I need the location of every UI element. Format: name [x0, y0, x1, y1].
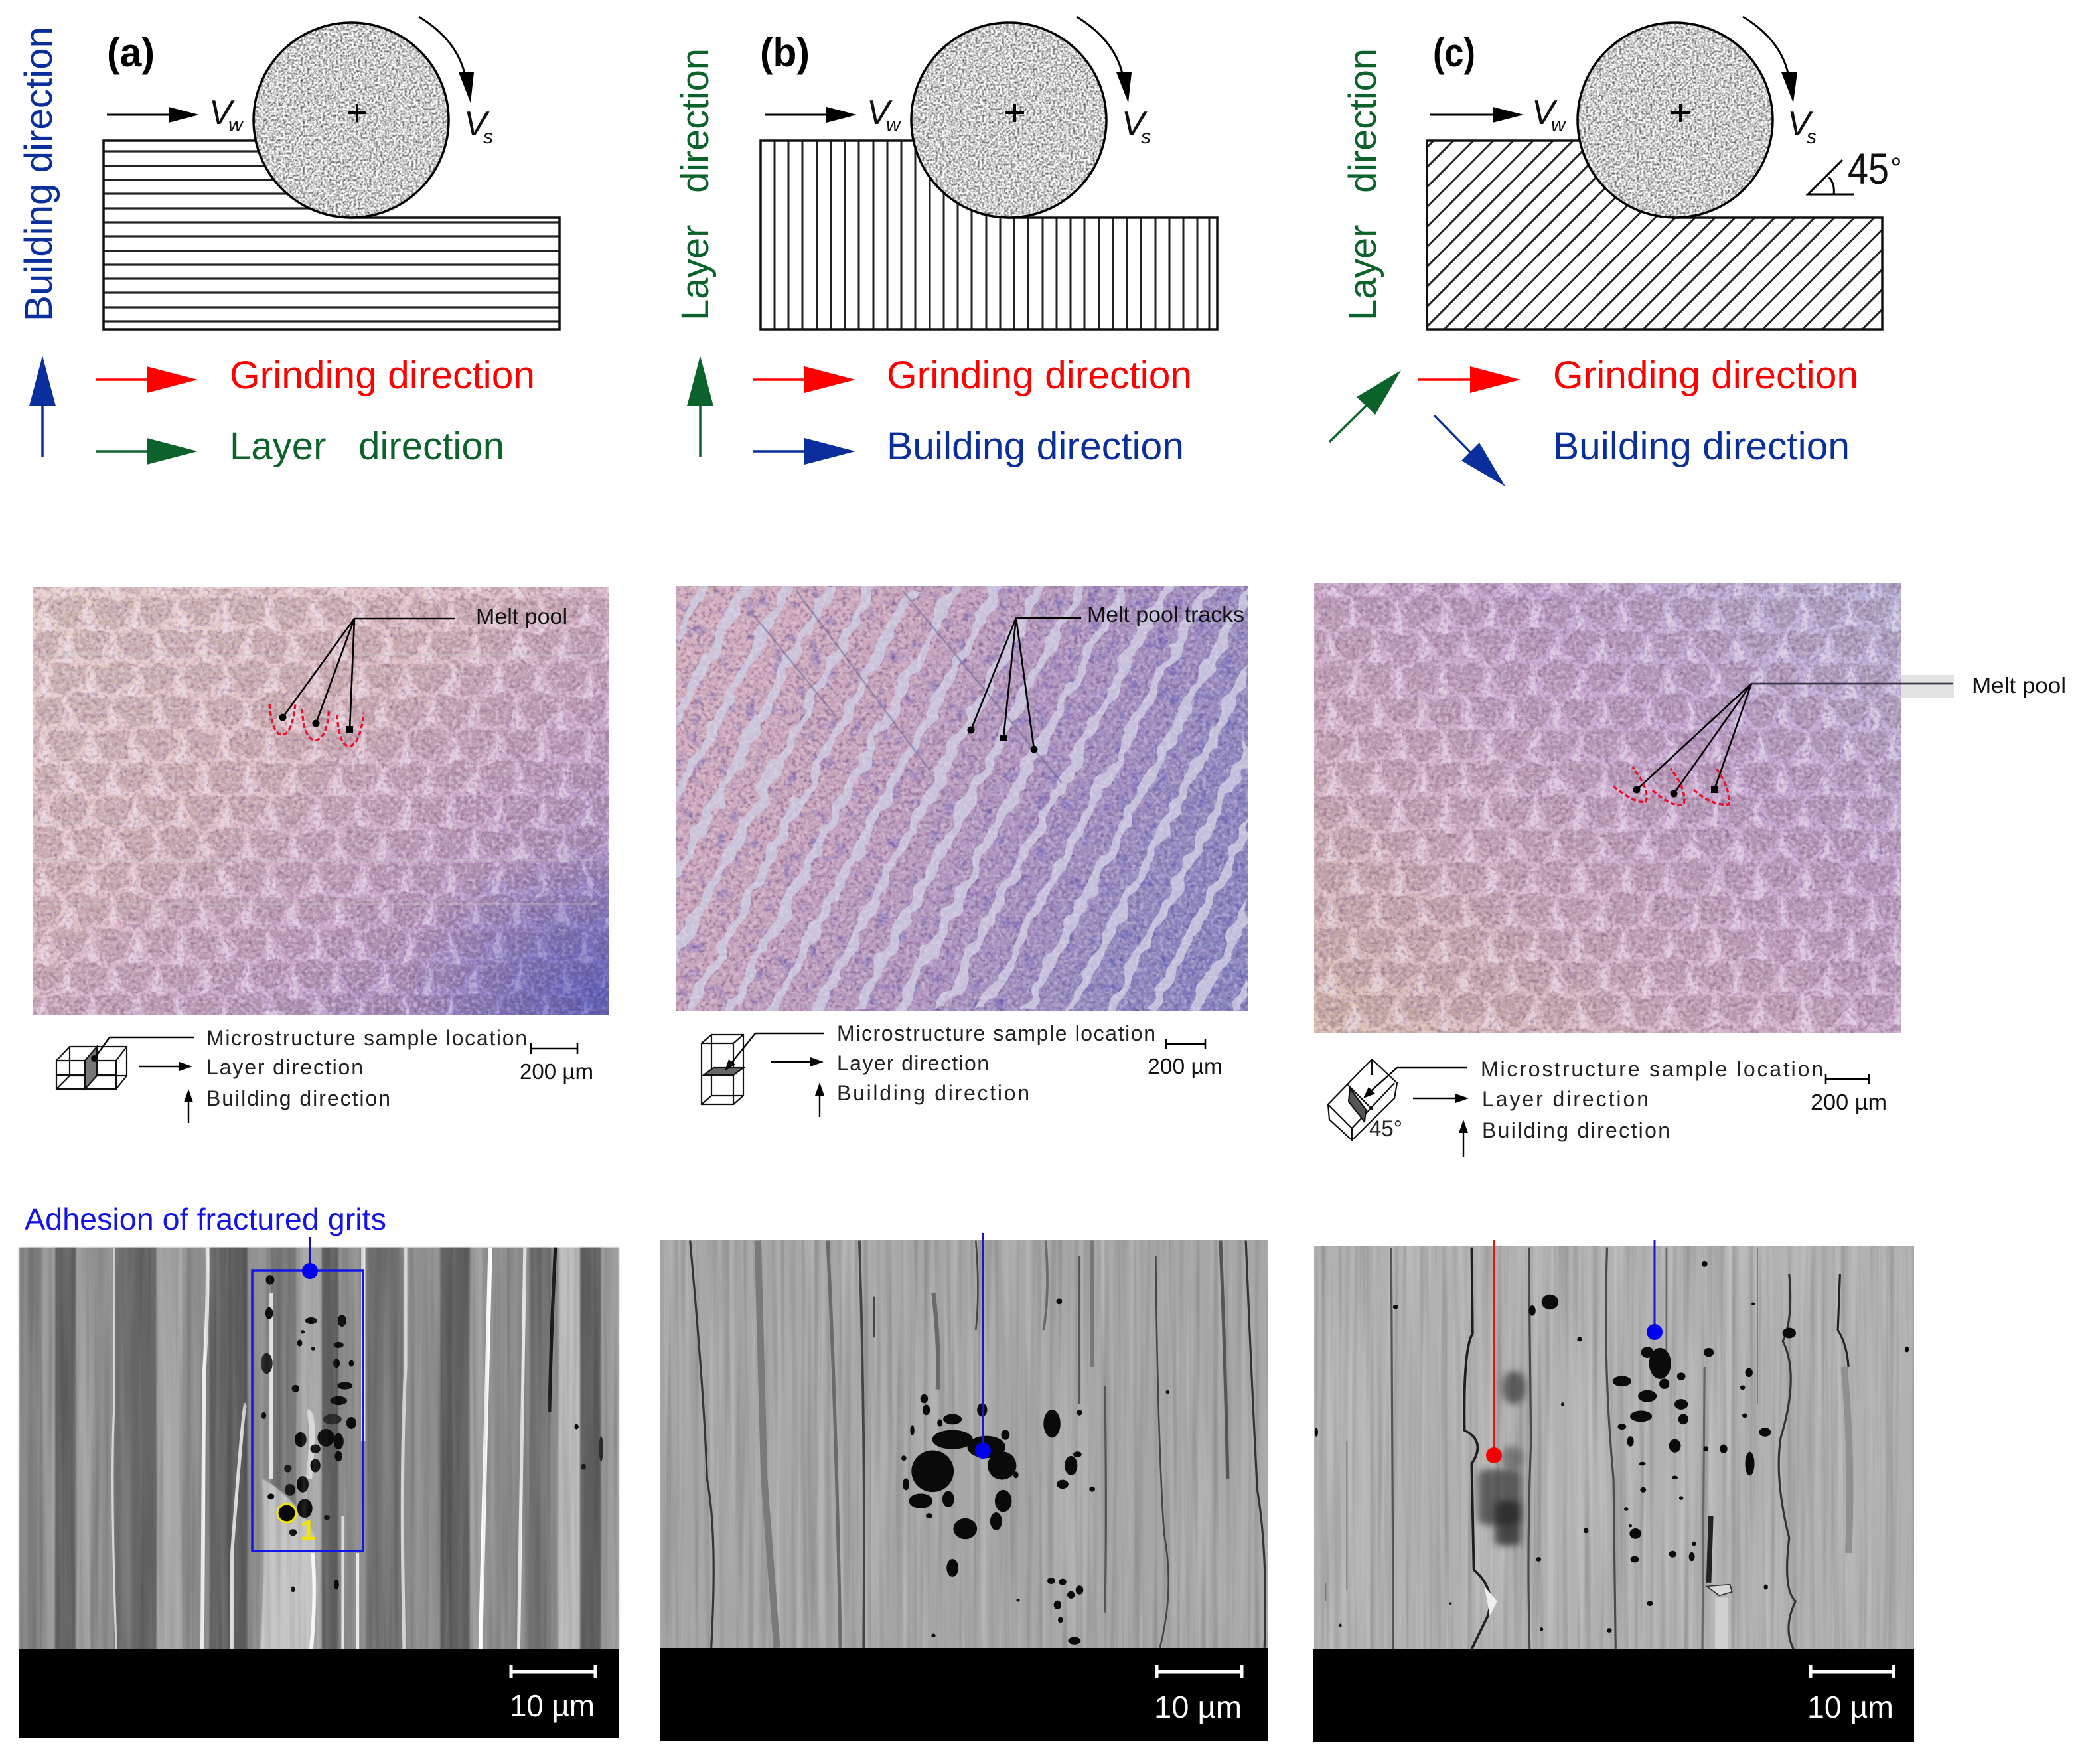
panel: SEM image (b)	[660, 1233, 1268, 1741]
sample orientation legend	[56, 1026, 593, 1123]
layer direction legend: Layer direction	[230, 425, 504, 468]
icon: sample cube	[56, 1047, 127, 1089]
microstructure sample location label	[1363, 1057, 1823, 1098]
microstructure sample location label: Microstructure sample location	[206, 1026, 527, 1050]
yellow point 1 marker	[277, 1504, 315, 1546]
wheel speed arrow Vs	[1743, 17, 1817, 148]
melt pool callout: Melt pool	[476, 604, 567, 628]
building direction diagonal arrow	[1434, 415, 1505, 486]
melt pool callout: Melt pool	[1972, 673, 2066, 698]
panel: grinding schematic (c)	[1329, 16, 1900, 486]
45 degree angle mark	[1808, 144, 1902, 194]
panel letter (c): (c)	[1433, 31, 1475, 75]
panel letter (a): (a)	[107, 31, 155, 75]
melt pool micrograph texture	[1314, 583, 1901, 1033]
melt pool tracks callout: Melt pool tracks	[1087, 602, 1244, 626]
building direction vertical label: Building direction	[17, 27, 60, 321]
layer direction legend	[96, 425, 504, 468]
feed speed arrow Vw: V	[867, 94, 893, 132]
grinding direction legend: Grinding direction	[230, 354, 535, 397]
dark smudges	[1478, 1371, 1526, 1546]
microstructure sample location label	[725, 1021, 1155, 1071]
microstructure sample location label: Microstructure sample location	[837, 1021, 1155, 1045]
SEM surface with grinding grooves	[19, 1248, 619, 1650]
panel: grinding schematic (a)	[17, 17, 559, 468]
black scale band: 10 µm	[510, 1688, 595, 1723]
black grit cluster	[901, 1298, 1169, 1645]
45 degree tilt label: 45°	[1369, 1116, 1402, 1141]
blue pointer marker	[1647, 1240, 1663, 1340]
scale bar 200 um	[1148, 1039, 1223, 1078]
building direction label: Building direction	[1482, 1118, 1670, 1142]
wheel speed arrow Vs	[1077, 17, 1151, 148]
scale bar 200 um	[1811, 1074, 1887, 1114]
grinding wheel	[254, 23, 449, 218]
scale bar 200 um: 200 µm	[1148, 1054, 1223, 1078]
workpiece with horizontal layers	[104, 141, 559, 329]
feed speed arrow Vw: w	[886, 114, 902, 136]
scale bar 200 um: 200 µm	[1811, 1090, 1887, 1114]
wheel speed arrow Vs: s	[1141, 126, 1151, 148]
layer direction vertical label: Layer direction	[1341, 48, 1384, 321]
wheel speed arrow Vs: V	[464, 105, 490, 143]
black grit particles	[1315, 1261, 1909, 1633]
wheel speed arrow Vs: s	[1807, 126, 1817, 148]
45 degree angle mark: °	[1890, 152, 1902, 184]
panel: SEM image (c)	[1313, 1240, 1914, 1742]
building direction legend	[753, 425, 1184, 468]
grinding direction legend	[1418, 354, 1858, 397]
sample orientation legend	[1328, 1057, 1887, 1157]
wheel speed arrow Vs: V	[1787, 105, 1813, 143]
heading: adhesion of fractured grits: Adhesion of fractured grits	[25, 1202, 386, 1236]
feed speed arrow Vw	[107, 94, 244, 136]
panel: micrograph (c)	[1314, 583, 2066, 1157]
icon: tilted sample cube	[1328, 1059, 1397, 1140]
layer direction diagonal arrow	[1329, 370, 1401, 442]
feed speed arrow Vw: w	[1551, 114, 1567, 136]
building direction legend: Building direction	[1553, 425, 1850, 468]
building direction arrow	[29, 356, 56, 457]
melt pool micrograph texture	[33, 587, 609, 1015]
black scale band	[660, 1648, 1268, 1741]
black scale band	[1313, 1649, 1914, 1742]
panel: SEM image (a)	[19, 1202, 619, 1738]
scale bar 200 um	[520, 1043, 593, 1084]
feed speed arrow Vw	[1430, 94, 1567, 136]
grinding direction legend: Grinding direction	[1553, 354, 1858, 397]
layer direction arrow	[687, 356, 713, 457]
building direction label: Building direction	[206, 1086, 390, 1110]
wheel speed arrow Vs: V	[1122, 105, 1148, 143]
sample orientation legend	[702, 1021, 1223, 1117]
panel: micrograph (b)	[676, 586, 1248, 1117]
feed speed arrow Vw	[765, 94, 902, 136]
building direction label	[815, 1081, 1029, 1117]
SEM surface with grinding grooves	[1314, 1246, 1914, 1649]
grinding direction legend	[753, 354, 1192, 397]
feed speed arrow Vw: V	[1532, 94, 1558, 132]
scale bar 200 um: 200 µm	[520, 1059, 593, 1084]
workpiece with 45 degree layers	[1426, 139, 1884, 331]
building direction legend: Building direction	[887, 425, 1184, 468]
black grit particles	[261, 1275, 603, 1592]
panel: micrograph (a)	[33, 587, 609, 1123]
black scale band: 10 µm	[1154, 1690, 1242, 1724]
melt pool tracks micrograph texture	[676, 586, 1248, 1011]
blue annotation box for adhesion region	[252, 1237, 363, 1551]
workpiece with vertical layers	[761, 141, 1217, 329]
feed speed arrow Vw: V	[209, 94, 235, 132]
wheel speed arrow Vs: s	[483, 126, 493, 148]
red pointer marker	[1486, 1240, 1502, 1463]
grinding wheel	[911, 23, 1106, 218]
grinding direction legend: Grinding direction	[887, 354, 1192, 397]
black scale band: 10 µm	[1807, 1690, 1894, 1724]
melt pool callout	[269, 604, 567, 746]
SEM surface with grinding grooves	[660, 1240, 1268, 1648]
layer direction label: Layer direction	[206, 1055, 363, 1079]
feed speed arrow Vw: w	[228, 114, 244, 136]
grinding direction legend	[96, 354, 535, 397]
melt pool tracks callout	[968, 602, 1244, 753]
45 degree angle mark: 45	[1848, 144, 1889, 193]
layer direction label: Layer direction	[1482, 1087, 1649, 1111]
grinding wheel	[1578, 23, 1773, 218]
microstructure sample location label	[91, 1026, 527, 1062]
building direction label: Building direction	[837, 1081, 1029, 1105]
black scale band	[19, 1649, 619, 1738]
microstructure sample location label: Microstructure sample location	[1481, 1057, 1823, 1081]
yellow point 1 marker: 1	[300, 1514, 315, 1546]
icon: sample cube	[702, 1035, 743, 1104]
panel: grinding schematic (b)	[674, 17, 1217, 468]
layer direction vertical label: Layer direction	[674, 48, 717, 321]
layer direction label: Layer direction	[837, 1051, 989, 1075]
melt pool callout	[1613, 673, 2066, 805]
wheel speed arrow Vs	[419, 17, 493, 148]
panel letter (b): (b)	[760, 31, 810, 75]
building direction label	[1459, 1118, 1670, 1157]
layer direction label	[771, 1051, 989, 1075]
building direction label	[184, 1086, 390, 1123]
blue pointer marker	[975, 1233, 991, 1459]
